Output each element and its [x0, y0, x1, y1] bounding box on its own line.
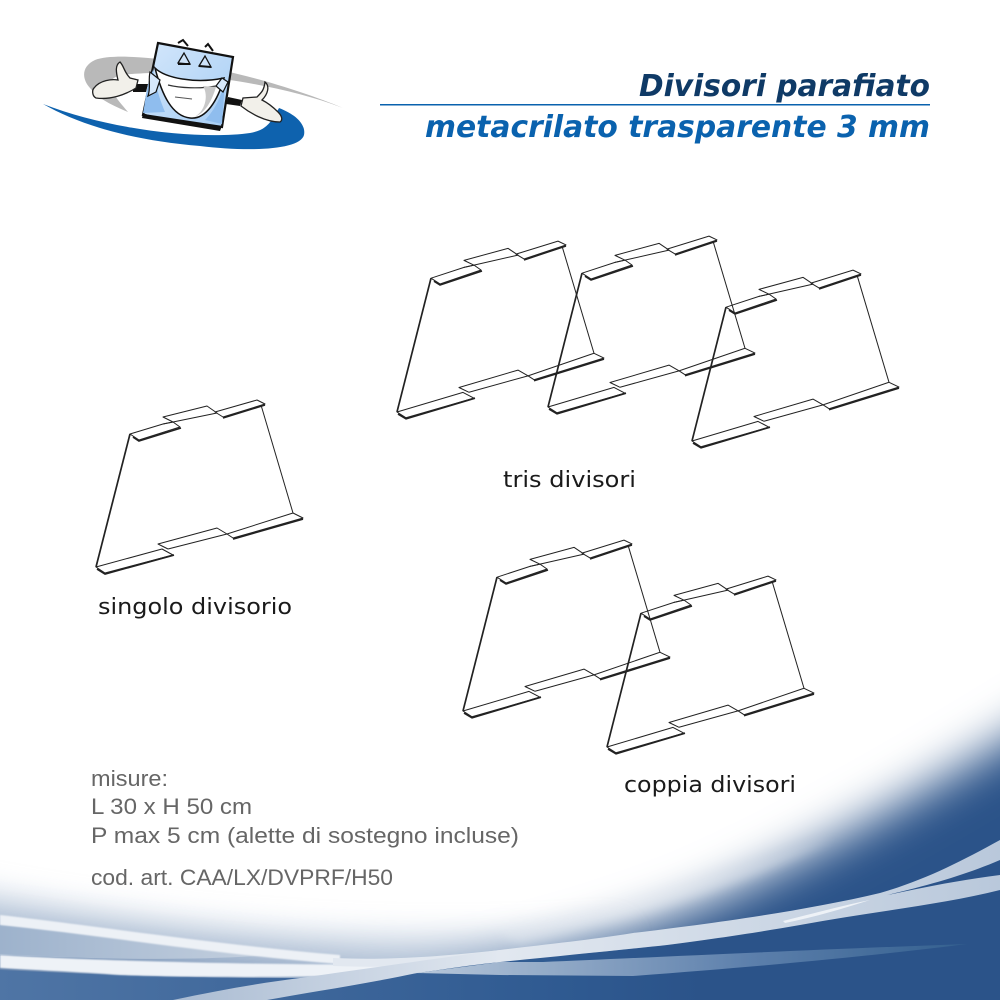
title: [425, 69, 930, 145]
illustration: coppia divisori: [463, 539, 814, 754]
mascot eyes: [178, 53, 211, 67]
mascot cheeks and mouth: [143, 70, 225, 124]
mascot body: [143, 43, 233, 127]
logo: mascot with swooshes: [43, 40, 343, 149]
heading line 2: metacrilato trasparente 3 mm: [425, 110, 930, 145]
mascot arms and hands: [133, 84, 242, 106]
label: tris divisori: tris divisori: [503, 468, 636, 493]
label: singolo divisorio: singolo divisorio: [98, 595, 292, 620]
text block: measurements: misure:: [91, 766, 168, 791]
illustration: singolo divisorio: [96, 400, 303, 574]
label: coppia divisori: coppia divisori: [624, 773, 796, 798]
grey swoosh: [84, 57, 343, 112]
text block: article code: cod. art. CAA/LX/DVPRF/H50: [91, 865, 393, 890]
heading line 1: Divisori parafiato: [639, 69, 930, 104]
text block: measurements: P max 5 cm (alette di sostegno incluse): [91, 823, 519, 848]
illustration: tris divisori: [397, 235, 899, 448]
blue swoosh: [43, 104, 304, 149]
text block: measurements: [91, 766, 519, 848]
text block: measurements: L 30 x H 50 cm: [91, 794, 252, 819]
